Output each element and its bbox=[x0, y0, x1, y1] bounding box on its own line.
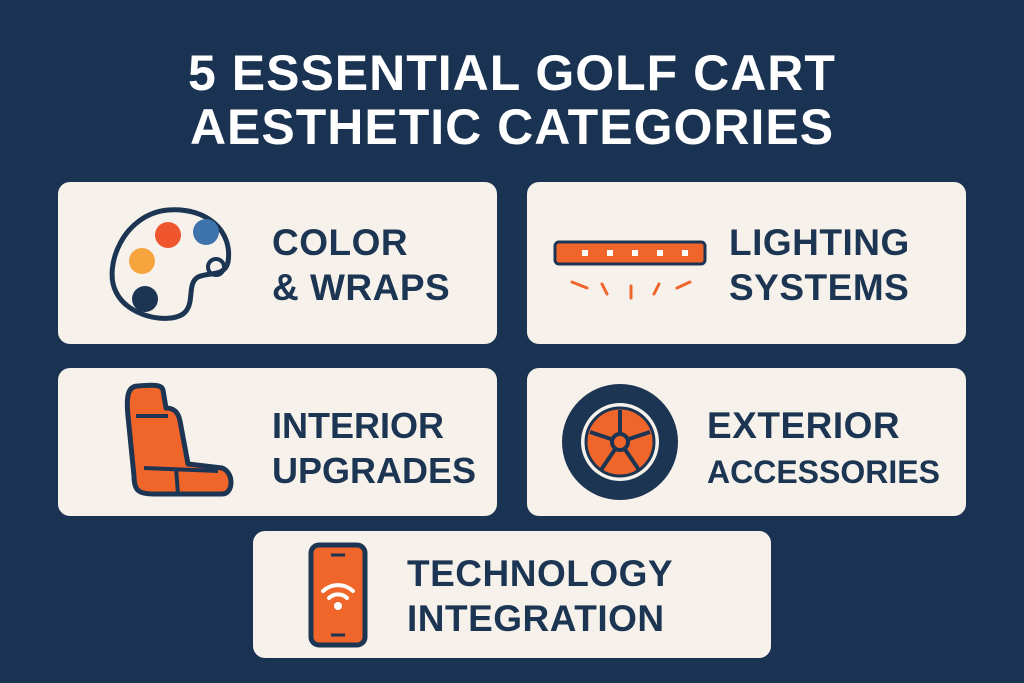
icon: phone bbox=[308, 542, 368, 648]
text bbox=[272, 405, 476, 491]
text bbox=[407, 553, 673, 639]
text: UPGRADES bbox=[272, 450, 476, 491]
text: EXTERIOR bbox=[707, 405, 900, 446]
title bbox=[188, 45, 836, 155]
icon: light bar bbox=[554, 240, 706, 300]
title: 5 ESSENTIAL GOLF CART bbox=[188, 45, 836, 101]
text: SYSTEMS bbox=[729, 267, 909, 308]
text: & WRAPS bbox=[272, 267, 450, 308]
text: INTEGRATION bbox=[407, 598, 665, 639]
text bbox=[272, 222, 450, 308]
text: ACCESSORIES bbox=[707, 454, 940, 490]
text: TECHNOLOGY bbox=[407, 553, 673, 594]
text: INTERIOR bbox=[272, 405, 444, 446]
panel: interior bbox=[58, 368, 497, 516]
panel: color & wraps bbox=[58, 182, 497, 344]
panel: exterior bbox=[527, 368, 966, 516]
text bbox=[729, 222, 910, 308]
text: COLOR bbox=[272, 222, 408, 263]
title: AESTHETIC CATEGORIES bbox=[190, 99, 834, 155]
panel: lighting bbox=[527, 182, 966, 344]
panel: technology bbox=[253, 531, 771, 658]
icon: palette bbox=[110, 207, 232, 321]
text bbox=[707, 405, 940, 490]
text: LIGHTING bbox=[729, 222, 910, 263]
icon: seat bbox=[124, 382, 234, 496]
icon: wheel bbox=[562, 384, 678, 500]
